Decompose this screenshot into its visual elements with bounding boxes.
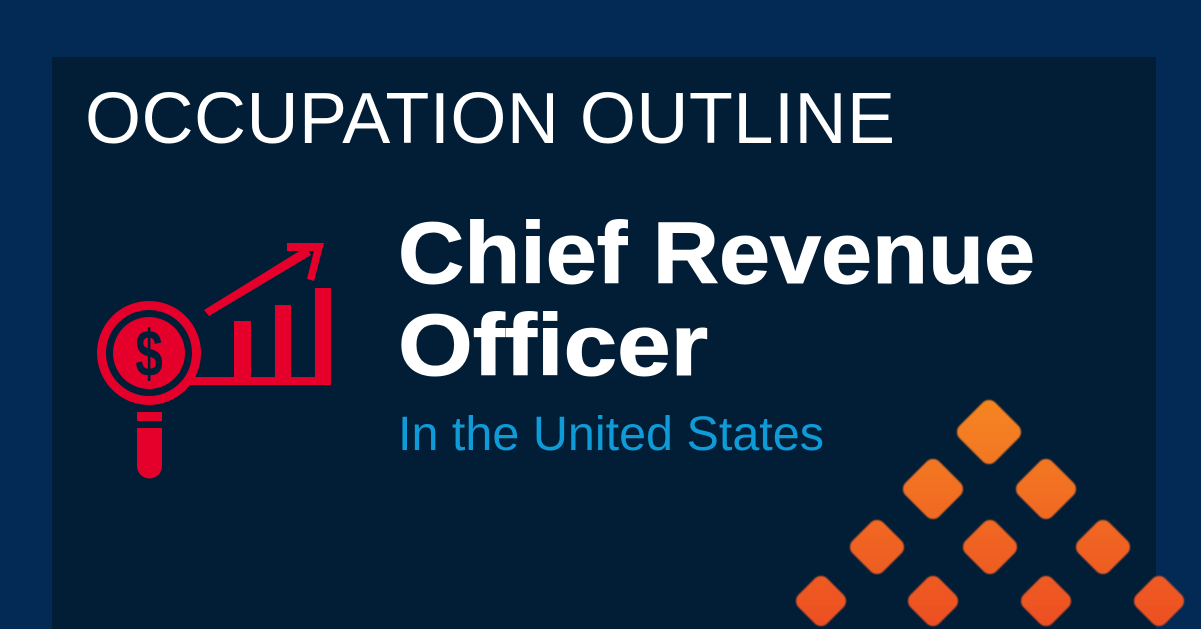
icon: magnifying glass lens: $ (135, 317, 163, 391)
decorative diamond triangle (805, 409, 1175, 617)
icon: bar chart (190, 288, 331, 385)
heading: chief revenue officer (398, 205, 1035, 394)
diamond row 2 (912, 468, 1067, 510)
icon: magnifying glass handle (137, 412, 162, 478)
icon: rising arrow (204, 243, 324, 316)
icon: magnifying glass lens (102, 306, 196, 400)
diamond row 3 (859, 529, 1121, 565)
heading: chief revenue officer: Officer (398, 297, 708, 394)
diamond row 1 (966, 409, 1012, 455)
title: occupation outline: OCCUPATION OUTLINE (85, 79, 895, 159)
heading: chief revenue officer: Chief Revenue (398, 205, 1035, 302)
icon: magnifier with dollar and rising bar chart (102, 243, 331, 478)
subheading: in the united states: In the United States (398, 408, 824, 461)
diamond row 4 (805, 585, 1175, 617)
